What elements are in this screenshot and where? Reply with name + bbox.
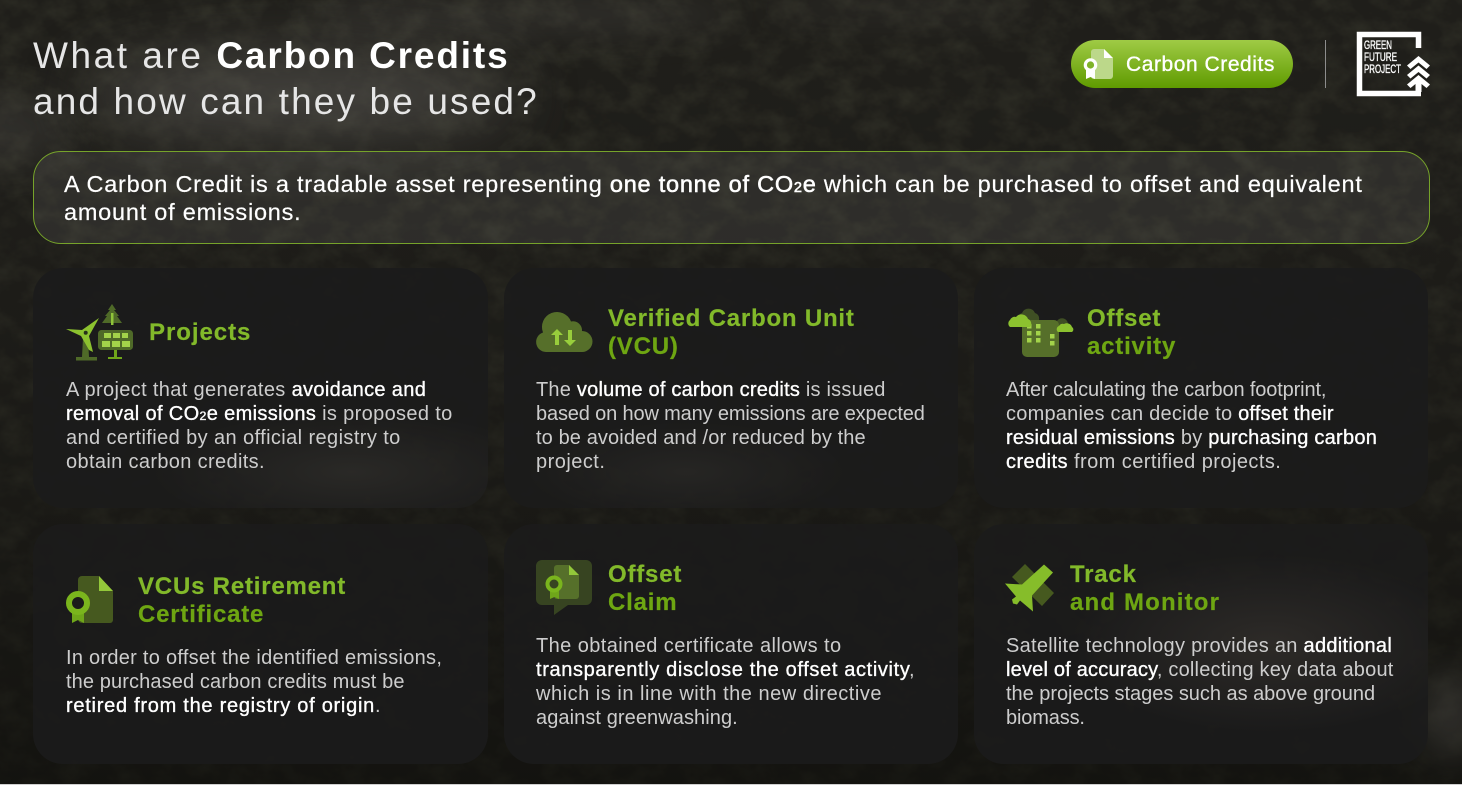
text block: transparently disclose the offset activity,: [536, 659, 915, 681]
title: and how can they be used?: [33, 81, 539, 122]
icon: cloud with arrows: [536, 312, 592, 352]
icon: building with clouds: [1008, 308, 1074, 357]
text block: companies can decide to offset their: [1006, 403, 1334, 425]
panel: Track and Monitor: [974, 524, 1428, 764]
heading: Projects: [149, 319, 251, 346]
text block: The volume of carbon credits is issued: [536, 379, 886, 401]
heading: Verified Carbon Unit: [608, 305, 855, 332]
divider: [1325, 40, 1326, 88]
logo: Green Future Project: GREEN: [1364, 38, 1392, 52]
text block: After calculating the carbon footprint,: [1006, 379, 1326, 401]
text block: to be avoided and /or reduced by the: [536, 427, 866, 449]
panel: Track and Monitor: and Monitor: [1070, 589, 1220, 616]
text block: In order to offset the identified emissions,: [66, 647, 442, 669]
badge: Carbon Credits pill: [1071, 40, 1293, 88]
panel: VCUs Retirement Certificate: [33, 524, 488, 764]
panel: Offset activity: [974, 268, 1428, 508]
logo: Green Future Project: PROJECT: [1364, 62, 1401, 76]
text block: residual emissions by purchasing carbon: [1006, 427, 1377, 449]
heading: Offset: [1087, 305, 1161, 332]
text block: [1006, 635, 1394, 729]
panel: VCUs Retirement Certificate: Certificate: [138, 601, 264, 628]
badge: Carbon Credits pill: Carbon Credits: [1126, 53, 1275, 76]
panel: Offset Claim: [504, 524, 958, 764]
icon: certificate document: [66, 576, 113, 623]
panel: Offset activity: activity: [1087, 333, 1176, 360]
text block: [1006, 379, 1377, 473]
text block: [66, 647, 442, 717]
banner: definition: amount of emissions.: [64, 199, 301, 225]
text block: the purchased carbon credits must be: [66, 671, 405, 693]
panel: Verified Carbon Unit: [504, 268, 958, 508]
text block: retired from the registry of origin.: [66, 695, 381, 717]
text block: based on how many emissions are expected: [536, 403, 925, 425]
text block: A project that generates avoidance and: [66, 379, 426, 401]
icon: satellite: [1005, 564, 1054, 612]
text block: removal of CO2e emissions is proposed to: [66, 403, 453, 425]
icon: wind turbine, tree and solar panel: [66, 304, 133, 360]
logo: Green Future Project: FUTURE: [1364, 50, 1397, 64]
text block: The obtained certificate allows to: [536, 635, 842, 657]
icon: certificate document: [1084, 49, 1113, 79]
heading: VCUs Retirement: [138, 573, 346, 600]
text block: [536, 635, 915, 729]
text block: against greenwashing.: [536, 707, 738, 729]
text block: Satellite technology provides an additional: [1006, 635, 1392, 657]
text block: biomass.: [1006, 707, 1085, 729]
logo: Green Future Project: [1356, 32, 1430, 96]
text block: the projects stages such as above ground: [1006, 683, 1375, 705]
text block: obtain carbon credits.: [66, 451, 265, 473]
heading: Offset: [608, 561, 682, 588]
title: What are Carbon Credits: [33, 35, 510, 76]
panel: Verified Carbon Unit: (VCU): [608, 333, 679, 360]
text block: level of accuracy, collecting key data about: [1006, 659, 1394, 681]
text block: [536, 379, 925, 473]
text block: [66, 379, 453, 473]
panel: Offset Claim: Claim: [608, 589, 677, 616]
banner: definition: [33, 151, 1430, 244]
text block: which is in line with the new directive: [536, 683, 882, 705]
text block: and certified by an official registry to: [66, 427, 401, 449]
heading: Track: [1070, 561, 1137, 588]
text block: project.: [536, 451, 605, 473]
banner: definition: A Carbon Credit is a tradable asset representing one tonne of CO2e which can be purchased to offset and equivalent: [64, 171, 1363, 197]
text block: credits from certified projects.: [1006, 451, 1281, 473]
title: [33, 35, 539, 122]
icon: speech bubble with certificate: [536, 560, 592, 615]
panel: Projects: [33, 268, 488, 508]
